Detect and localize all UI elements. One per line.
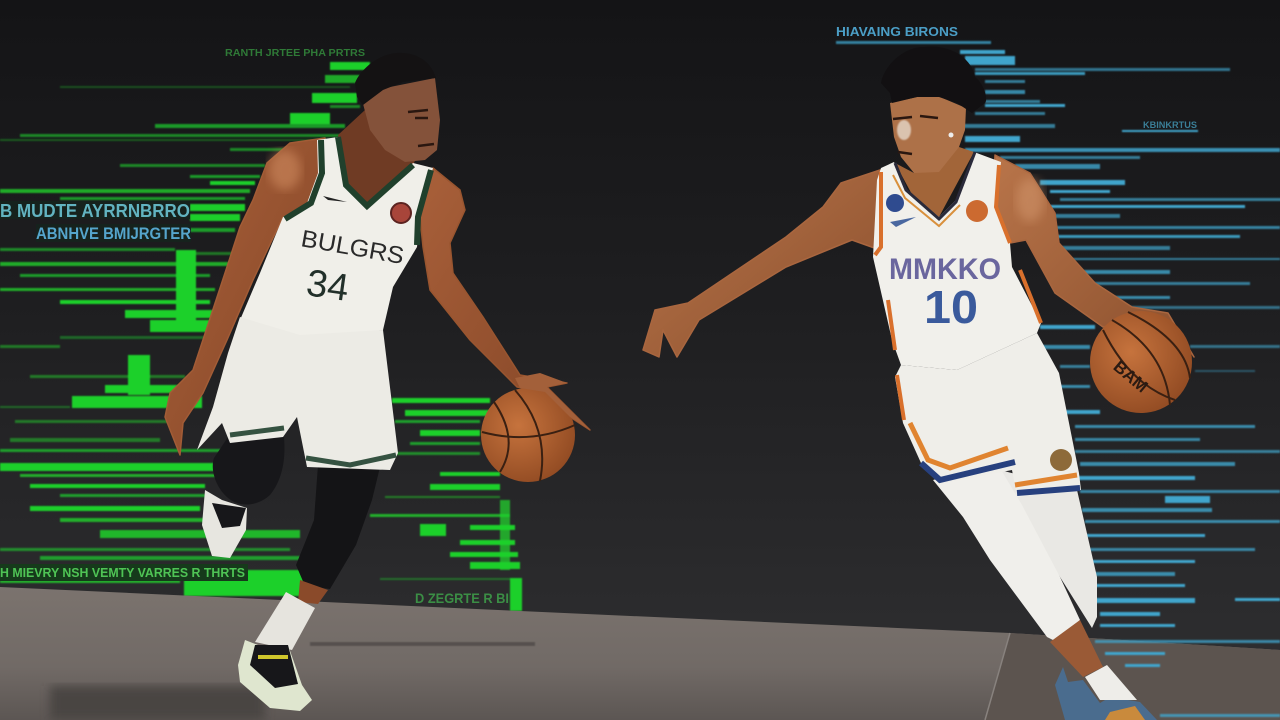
- face details: [408, 110, 434, 146]
- shorts trim: [230, 428, 396, 465]
- head: [362, 78, 440, 162]
- face details: [893, 116, 954, 154]
- basketball: [481, 388, 575, 482]
- jersey collar: [895, 152, 975, 219]
- near arm with hand: [643, 170, 880, 357]
- subheading: left blue caption: ABNHVE BMIJRGTER: [36, 224, 191, 243]
- jersey wordmark: BULGRS: [299, 225, 406, 270]
- blue streaks over the right floor: [1095, 640, 1280, 717]
- basketball: [1090, 311, 1192, 413]
- front leg compression sleeve: [933, 463, 1080, 642]
- shorts trim: [910, 423, 1077, 485]
- heading: left blue caption: B MUDTE AYRRNBRRO: [0, 201, 190, 221]
- jersey badges: [886, 194, 988, 227]
- jersey trim: [285, 137, 431, 245]
- jersey: [240, 137, 433, 340]
- neck: [895, 147, 974, 217]
- shoulder highlight: [269, 150, 301, 190]
- label: right blue: KBINKRTUS: [1143, 120, 1197, 130]
- fingers over ball: [515, 373, 590, 430]
- hair: [881, 47, 986, 113]
- player: right in white and orange kit: [643, 47, 1194, 720]
- far arm: [992, 155, 1194, 357]
- label: top right blue: HIAVAING BIRONS: [836, 24, 958, 39]
- basketball: BAM: [1110, 357, 1152, 396]
- green data streaks: [0, 62, 522, 611]
- head: [890, 97, 966, 173]
- jersey trim: [875, 165, 1041, 350]
- shorts: [197, 317, 398, 470]
- hair: [355, 53, 436, 105]
- blue data streaks: [836, 41, 1280, 627]
- neck: [338, 110, 420, 208]
- back leg with knee sleeve and shoe: [202, 437, 284, 558]
- floor: [0, 587, 1280, 720]
- far arm and hand: [420, 168, 590, 430]
- socks and shoes: [1055, 665, 1157, 720]
- player: left in white and green kit: [165, 53, 590, 711]
- rear leg: [1000, 470, 1097, 628]
- near arm and hand: [165, 138, 325, 455]
- jersey badge: [391, 203, 411, 223]
- label: top left green: RANTH JRTEE PHA PRTRS: [225, 48, 365, 59]
- shorts: [895, 333, 1081, 497]
- jersey number: 34: [304, 262, 351, 310]
- lower leg: [1050, 620, 1103, 677]
- jersey wordmark: MMKKO: [889, 253, 1001, 286]
- jersey logo swoosh: [323, 196, 347, 202]
- label: bottom left green: H MIEVRY NSH VEMTY VARRES R THRTS: [0, 565, 245, 580]
- front leg tights, sock and shoe: [238, 465, 380, 711]
- arm highlight: [1016, 178, 1044, 222]
- jersey number: 10: [924, 281, 978, 333]
- jersey: [873, 152, 1041, 370]
- shorts logo: [1050, 449, 1072, 471]
- label: bottom centre green: D ZEGRTE R BI: [415, 590, 509, 606]
